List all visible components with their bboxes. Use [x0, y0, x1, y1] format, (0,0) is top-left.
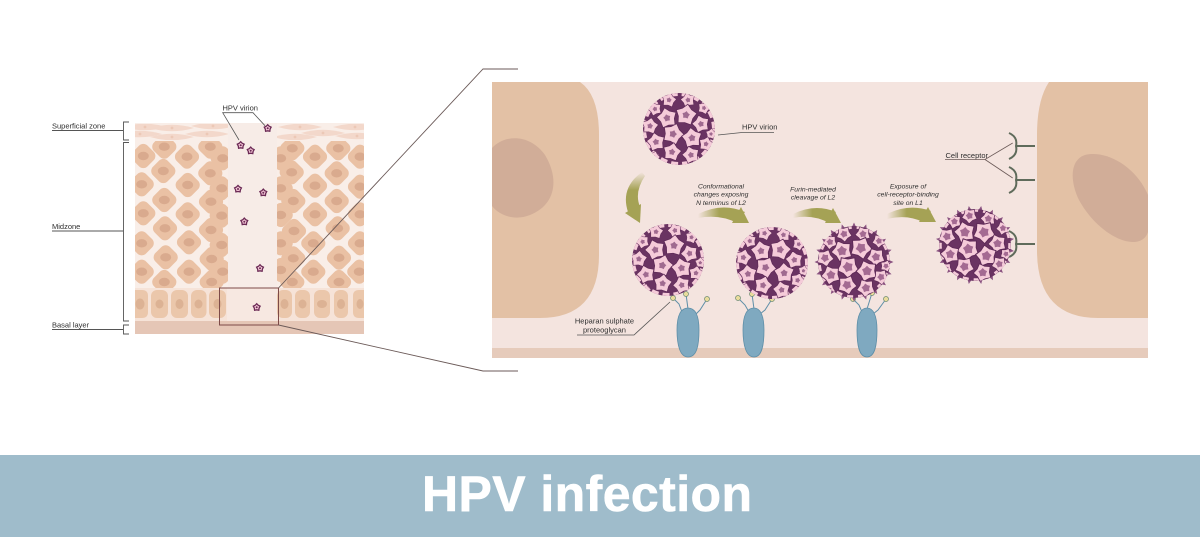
left cell — [492, 82, 599, 318]
label: exposure: cell-receptor-binding — [877, 192, 939, 199]
proteoglycan 3 — [850, 290, 888, 357]
brackets — [52, 122, 129, 334]
selection box — [220, 288, 278, 325]
right nucleus — [1073, 154, 1148, 242]
right cell — [1037, 82, 1148, 318]
label: conformational changes: changes exposing — [694, 192, 749, 199]
panel: enlarged view — [492, 82, 1148, 358]
label: HPV virion: HPV virion — [222, 104, 258, 112]
arrow: conformational — [698, 207, 749, 223]
basal layer cells — [135, 288, 364, 321]
virion: free — [641, 91, 717, 165]
label: midzone: Midzone — [52, 222, 80, 231]
virion: bound to receptor — [930, 200, 1020, 290]
label: basal layer: Basal layer — [52, 320, 90, 330]
left nucleus — [492, 138, 553, 218]
basement strip — [492, 348, 1148, 358]
label: furin cleavage: Furin-mediated — [790, 186, 836, 194]
panel background — [492, 82, 1148, 358]
wound channel — [228, 123, 277, 288]
basement membrane — [135, 321, 364, 334]
arrow: attachment — [625, 172, 645, 223]
label: heparan sulphate proteoglycan: proteoglycan — [583, 326, 626, 334]
label: heparan sulphate proteoglycan: Heparan sulphate — [575, 316, 634, 326]
title: HPV infection — [422, 466, 752, 522]
label: cell receptor: Cell receptor — [946, 151, 989, 160]
label: HPV virion — [718, 122, 777, 135]
label: exposure: Exposure of — [890, 184, 927, 190]
proteoglycan 2 — [736, 292, 774, 357]
label: HPV virion: HPV virion — [742, 122, 777, 132]
virion: conformational change — [731, 222, 813, 302]
virion: attached to proteoglycan — [627, 219, 708, 299]
midzone cells right — [277, 141, 364, 288]
arrow: cleavage — [793, 208, 841, 223]
label: conformational changes: N terminus of L2 — [696, 200, 746, 207]
title banner — [0, 455, 1200, 537]
arrow: exposure — [887, 207, 936, 222]
panel: epithelium cross-section — [135, 123, 364, 334]
superficial zone cells — [135, 124, 364, 140]
label: superficial zone: Superficial zone — [52, 122, 105, 130]
proteoglycan 1 — [670, 292, 710, 357]
label: exposure: site on L1 — [893, 200, 923, 207]
midzone cells left — [135, 141, 228, 288]
label: conformational changes: Conformational — [698, 184, 745, 190]
tissue background — [135, 123, 364, 334]
zoom connector lines — [278, 69, 518, 371]
leader lines — [223, 113, 265, 140]
virion: furin cleaved — [814, 222, 894, 302]
small HPV virions — [235, 125, 271, 310]
labels: tissue layers — [52, 104, 265, 334]
label: furin cleavage: cleavage of L2 — [791, 195, 835, 202]
receptors — [1009, 133, 1035, 257]
label: cell receptor — [945, 143, 1013, 178]
label: heparan sulphate proteoglycan — [575, 302, 670, 335]
banner background — [0, 455, 1200, 537]
